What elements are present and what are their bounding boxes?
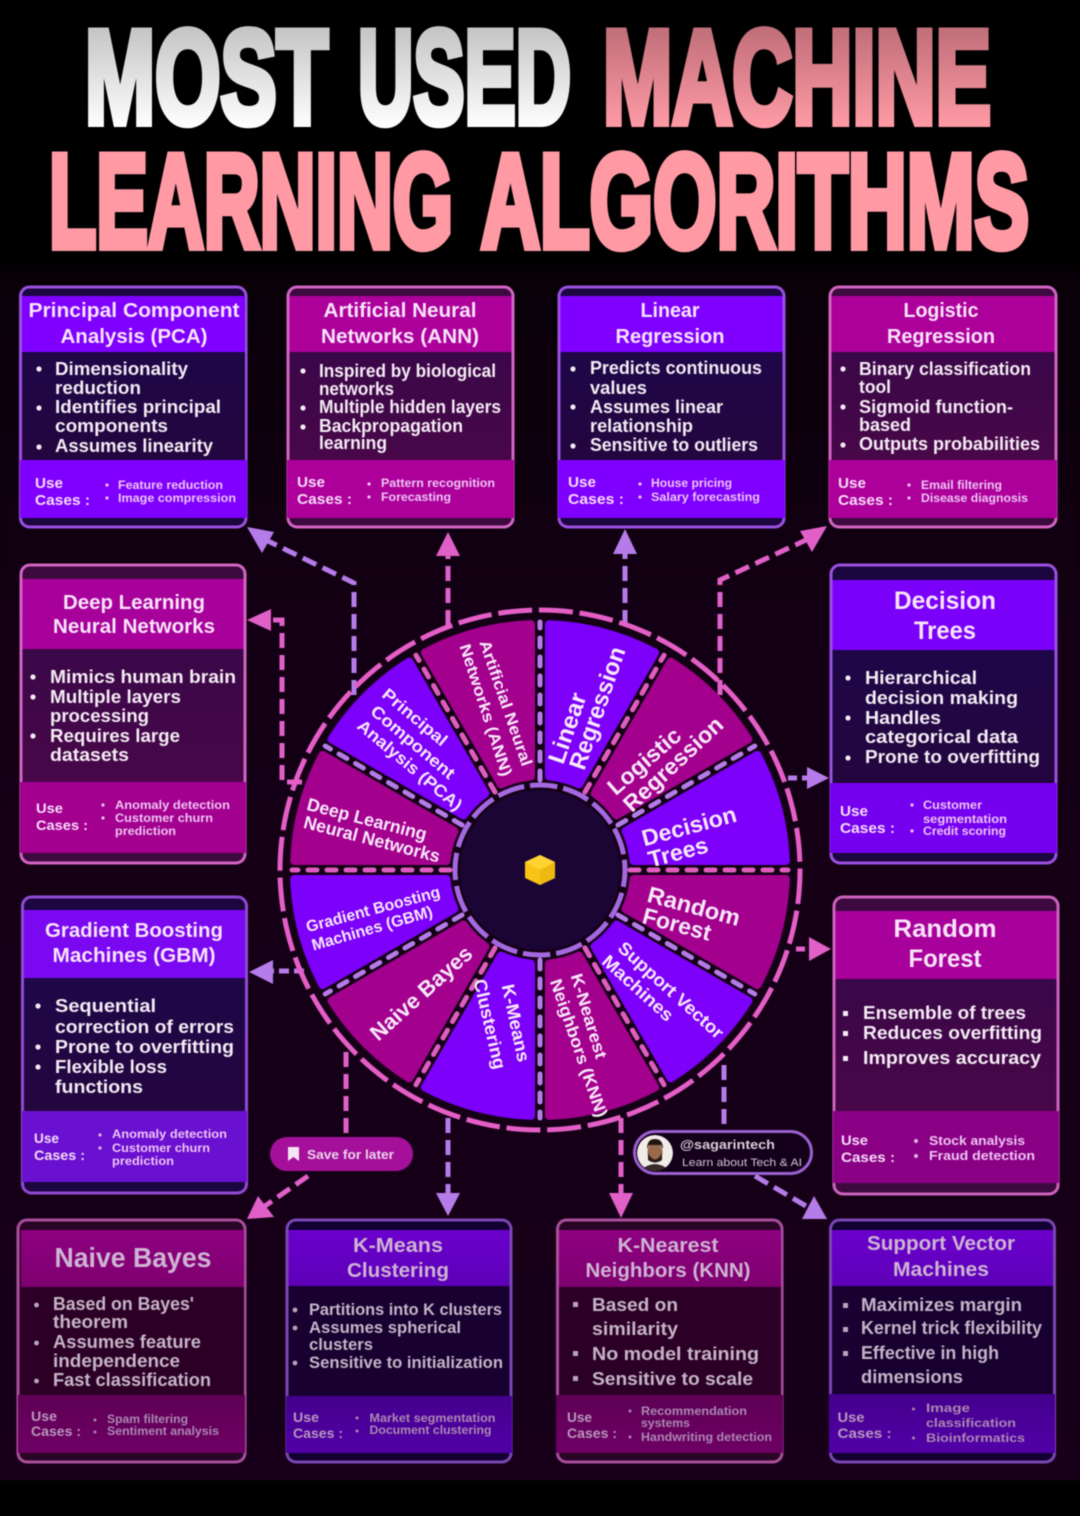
- bullet list: [35, 996, 234, 1097]
- use cases: Bioinformatics: [926, 1433, 1025, 1445]
- wheel segment labels: Support Vector: [614, 938, 728, 1043]
- callout: author badge: [634, 1132, 812, 1174]
- use cases: [568, 474, 760, 508]
- use cases: Cases :: [293, 1425, 343, 1441]
- wheel segment labels: Analysis (PCA): [353, 716, 466, 815]
- use cases: Image: [926, 1403, 970, 1415]
- header band: [288, 1230, 510, 1286]
- heading: K-Nearest: [618, 1235, 719, 1257]
- card frame: [831, 565, 1056, 863]
- wheel segment labels: Component: [367, 702, 459, 783]
- bullet list: Multiple hidden layers: [319, 397, 501, 417]
- use cases: Customer churn: [115, 813, 213, 825]
- bullet list: Partitions into K clusters: [309, 1301, 502, 1319]
- wheel segment labels: Neighbors (KNN): [546, 977, 611, 1120]
- use cases: [36, 800, 230, 838]
- wheel segment labels: Regression: [618, 711, 728, 817]
- panel: Logistic Regression: [829, 287, 1057, 527]
- wheel segment labels: Deep Learning: [305, 794, 429, 844]
- heading: Regression: [616, 326, 724, 348]
- heading: Neighbors (KNN): [586, 1260, 750, 1282]
- card frame: [830, 287, 1056, 527]
- bullet list: [845, 668, 1040, 767]
- title: USED: [358, 4, 571, 152]
- bullet list: Maximizes margin: [861, 1295, 1022, 1315]
- use cases: Use: [838, 475, 866, 492]
- heading: Networks (ANN): [321, 326, 479, 348]
- arrow: wheel to K-Nearest Neighbors: [609, 1118, 633, 1218]
- heading: [28, 300, 240, 348]
- bullet list: Multiple layers: [50, 687, 181, 707]
- panel: Deep Learning Neural Networks: [20, 565, 246, 863]
- bullet list: [843, 1295, 1042, 1387]
- card frame: [21, 565, 245, 863]
- header band: [832, 1230, 1053, 1286]
- bullet list: Prone to overfitting: [865, 747, 1040, 767]
- use cases: Anomaly detection: [115, 800, 230, 812]
- bullet list: [840, 359, 1040, 454]
- heading: [53, 592, 215, 638]
- arrow: wheel to Logistic Regression: [720, 526, 827, 695]
- wheel segment labels: Decision: [639, 801, 739, 851]
- use cases: Cases :: [35, 492, 90, 509]
- panel: Linear Regression: [558, 287, 785, 527]
- use cases: [297, 474, 495, 508]
- use cases: Use: [840, 803, 868, 820]
- header band: [836, 911, 1056, 979]
- heading: Naive Bayes: [54, 1242, 212, 1273]
- heading: Artificial Neural: [324, 300, 476, 322]
- use cases: Cases :: [567, 1425, 617, 1441]
- bullet list: values: [590, 378, 647, 398]
- use cases: Cases :: [31, 1423, 81, 1439]
- heading: Support Vector: [867, 1233, 1015, 1255]
- heading: Trees: [914, 617, 976, 645]
- bullet list: Prone to overfitting: [55, 1037, 234, 1057]
- use cases: Salary forecasting: [651, 492, 760, 504]
- wheel segment labels: Regression: [564, 643, 631, 773]
- use cases: Anomaly detection: [112, 1129, 227, 1141]
- use cases: segmentation: [923, 814, 1007, 826]
- use cases: Use: [841, 1132, 868, 1148]
- wheel segments: [270, 600, 810, 1140]
- bullet list: [843, 1003, 1042, 1068]
- card frame: [288, 287, 513, 527]
- bullet list: Effective in high: [861, 1343, 999, 1363]
- card frame: [18, 1220, 245, 1462]
- bullet list: Ensemble of trees: [863, 1003, 1026, 1023]
- header band: [560, 296, 782, 352]
- use cases: [838, 475, 1028, 509]
- bullet list: [34, 1294, 211, 1390]
- use cases: Use: [838, 1409, 865, 1425]
- use cases: Customer: [923, 800, 983, 812]
- wheel segment labels: [302, 638, 743, 1120]
- heading: [45, 920, 223, 967]
- header band: [22, 296, 245, 352]
- bullet list: independence: [53, 1351, 180, 1371]
- arrow: wheel to Naive Bayes: [247, 1052, 346, 1219]
- use cases: Cases :: [297, 491, 352, 508]
- use cases: Use: [567, 1409, 592, 1425]
- use cases: Recommendation: [641, 1406, 747, 1418]
- bullet list: based: [859, 415, 911, 435]
- use cases: Use: [36, 800, 63, 816]
- bullet list: Sensitive to scale: [592, 1369, 753, 1389]
- use cases: [293, 1409, 496, 1441]
- header band: [559, 1230, 781, 1287]
- use cases: Use: [31, 1408, 57, 1424]
- wheel segment labels: Machines: [598, 951, 678, 1025]
- arrow: wheel to Principal Component Analysis: [247, 527, 354, 695]
- bullet list: Identifies principal: [55, 397, 221, 417]
- panel: K-Means Clustering: [286, 1220, 512, 1462]
- heading: K-Means: [353, 1235, 443, 1257]
- heading: Random: [894, 915, 996, 943]
- panel: Support Vector Machines: [829, 1220, 1055, 1462]
- use cases: Use: [297, 474, 325, 491]
- title: LEARNING: [49, 128, 453, 276]
- use cases: Use: [293, 1409, 319, 1425]
- use cases: Market segmentation: [370, 1413, 496, 1425]
- bullet list: Sigmoid function-: [859, 397, 1013, 417]
- bullet list: Predicts continuous: [590, 358, 762, 378]
- bullet list: relationship: [590, 416, 693, 436]
- bullet list: components: [55, 416, 168, 436]
- use cases: Use: [34, 1130, 59, 1146]
- wheel segment labels: Machines (GBM): [310, 904, 435, 954]
- arrow: wheel to K-Means: [436, 1118, 460, 1216]
- panel: Artificial Neural Networks: [287, 287, 514, 527]
- title: [49, 4, 1029, 276]
- heading: Principal Component: [28, 300, 240, 322]
- wheel segment labels: K-Nearest: [567, 971, 611, 1061]
- panel: Principal Component Analysis: [20, 287, 247, 527]
- wheel segment labels: Random: [645, 881, 743, 931]
- bullet list: Mimics human brain: [50, 667, 236, 687]
- use cases: Use: [568, 474, 596, 491]
- heading: [867, 1233, 1015, 1281]
- use cases: Use: [35, 475, 63, 492]
- use cases: systems: [641, 1418, 690, 1430]
- use cases: Spam filtering: [107, 1414, 188, 1426]
- wheel diagram: [270, 600, 810, 1140]
- bullet list: Sensitive to outliers: [590, 435, 758, 455]
- heading: Clustering: [347, 1260, 449, 1282]
- use cases: Cases :: [36, 817, 88, 833]
- arrow: wheel to Linear Regression: [613, 529, 637, 625]
- use cases: House pricing: [651, 478, 732, 490]
- title: MOST: [85, 4, 328, 152]
- use cases: Cases :: [838, 1425, 892, 1441]
- heading: Linear: [640, 300, 700, 322]
- use cases: Image compression: [118, 493, 236, 505]
- bullet list: Backpropagation: [319, 416, 463, 436]
- panel: K-Nearest Neighbors: [556, 1220, 783, 1462]
- wheel segment labels: Gradient Boosting: [304, 884, 442, 936]
- use cases: Sentiment analysis: [107, 1426, 219, 1438]
- bullet list: Dimensionality: [55, 359, 188, 379]
- bullet list: Assumes linear: [590, 397, 723, 417]
- use cases: classification: [926, 1418, 1016, 1430]
- heading: Gradient Boosting: [45, 920, 223, 942]
- wheel segment labels: Linear: [543, 689, 592, 767]
- use cases: Customer churn: [112, 1143, 210, 1155]
- wheel segment labels: K-Means: [498, 982, 534, 1064]
- use cases: Handwriting detection: [641, 1432, 772, 1444]
- use cases: Fraud detection: [929, 1148, 1035, 1163]
- use cases: Cases :: [840, 820, 895, 837]
- card frame: [830, 1220, 1054, 1462]
- bullet list: theorem: [53, 1312, 128, 1332]
- bullet list: Kernel trick flexibility: [861, 1318, 1042, 1338]
- bullet list: Fast classification: [53, 1370, 211, 1390]
- header band: [21, 1230, 244, 1287]
- bullet list: reduction: [55, 378, 141, 398]
- wheel segment labels: Forest: [640, 902, 714, 946]
- header band: [24, 910, 245, 978]
- use cases: [567, 1406, 772, 1444]
- arrow: wheel to Support Vector Machines: [724, 1065, 827, 1219]
- bullet list: functions: [55, 1077, 143, 1097]
- wheel outer dashed ring: [280, 610, 800, 1130]
- bullet list: networks: [319, 379, 394, 399]
- use cases: Credit scoring: [923, 826, 1006, 838]
- bullet list: Reduces overfitting: [863, 1023, 1042, 1043]
- heading: Decision: [894, 587, 996, 615]
- panel: Random Forest: [833, 897, 1059, 1194]
- bullet list: Inspired by biological: [319, 361, 496, 381]
- use cases: Cases :: [34, 1147, 85, 1163]
- bullet list: correction of errors: [55, 1017, 234, 1037]
- heading: Machines (GBM): [52, 945, 215, 967]
- panel: Gradient Boosting Machines: [22, 897, 247, 1193]
- use cases: [841, 1132, 1035, 1165]
- wheel segment labels: Artificial Neural: [475, 638, 534, 769]
- use cases: Stock analysis: [929, 1133, 1025, 1148]
- header band: [290, 296, 512, 352]
- heading: Logistic: [904, 300, 978, 322]
- heading: [586, 1235, 750, 1282]
- bullet list: [300, 361, 501, 453]
- icon: bookmark: [288, 1147, 299, 1161]
- bullet list: Requires large: [50, 726, 180, 746]
- heading: Neural Networks: [53, 616, 215, 638]
- card frame: [20, 287, 246, 527]
- callout: author badge: @sagarintech: [680, 1137, 775, 1152]
- header band: [832, 296, 1054, 352]
- bullet list: Based on Bayes': [53, 1294, 194, 1314]
- bullet list: [30, 667, 236, 765]
- bullet list: Improves accuracy: [863, 1048, 1041, 1068]
- wheel segment labels: Trees: [645, 832, 711, 872]
- card frame: [558, 1220, 782, 1462]
- bullet list: Flexible loss: [55, 1057, 167, 1077]
- use cases: Document clustering: [370, 1425, 492, 1437]
- bullet list: [293, 1301, 503, 1372]
- panel: Decision Trees: [830, 565, 1057, 863]
- heading: Regression: [887, 326, 995, 348]
- heading: [616, 300, 724, 348]
- card frame: [287, 1220, 511, 1462]
- arrow: wheel to Decision Trees: [788, 767, 829, 789]
- bullet list: tool: [859, 377, 891, 397]
- icon: yellow cube: [525, 855, 555, 885]
- icon: author avatar: [637, 1135, 673, 1172]
- bullet list: learning: [319, 433, 387, 453]
- heading: Forest: [908, 945, 982, 973]
- bullet list: clusters: [309, 1336, 373, 1354]
- arrow: wheel to Gradient Boosting: [249, 960, 304, 984]
- header band: [832, 580, 1054, 650]
- card frame: [559, 287, 784, 527]
- callout: author badge: Learn about Tech & AI: [682, 1157, 802, 1169]
- bullet list: Sequential: [55, 996, 156, 1016]
- heading: [887, 300, 995, 348]
- use cases: Forecasting: [381, 492, 451, 504]
- heading: Analysis (PCA): [60, 326, 208, 348]
- header band: [22, 579, 244, 649]
- bullet list: Assumes feature: [53, 1332, 201, 1352]
- bullet list: dimensions: [861, 1367, 963, 1387]
- bullet list: Handles: [865, 708, 941, 728]
- card frame: [834, 897, 1058, 1194]
- wheel segment labels: Principal: [378, 685, 451, 750]
- wheel segment labels: Neural Networks: [302, 812, 442, 866]
- use cases: Feature reduction: [118, 480, 223, 492]
- wheel hub: [460, 790, 620, 950]
- use cases: Pattern recognition: [381, 478, 495, 490]
- wheel segment labels: Logistic: [602, 722, 686, 800]
- arrow: wheel to Random Forest: [796, 937, 831, 961]
- use cases: prediction: [112, 1156, 174, 1168]
- bullet list: [36, 359, 221, 456]
- heading: Deep Learning: [63, 592, 205, 614]
- heading: [321, 300, 479, 348]
- bullet list: similarity: [592, 1319, 678, 1339]
- use cases: prediction: [115, 826, 176, 838]
- bullet list: Assumes linearity: [55, 436, 213, 456]
- use cases: Disease diagnosis: [921, 493, 1028, 505]
- bullet list: [573, 1295, 759, 1389]
- use cases: [35, 475, 236, 509]
- heading: [894, 587, 996, 645]
- use cases: Cases :: [568, 491, 624, 508]
- bullet list: decision making: [865, 688, 1018, 708]
- callout: save for later: Save for later: [307, 1147, 394, 1162]
- heading: [347, 1235, 449, 1282]
- use cases: Cases :: [841, 1149, 895, 1165]
- bullet list: Hierarchical: [865, 668, 977, 688]
- wheel segment labels: Naive Bayes: [365, 941, 477, 1046]
- arrow: wheel to Deep Learning: [247, 609, 302, 782]
- bullet list: Based on: [592, 1295, 678, 1315]
- bullet list: datasets: [50, 745, 129, 765]
- callout: save for later: [270, 1137, 413, 1171]
- panel: Naive Bayes: [18, 1220, 245, 1462]
- bullet list: categorical data: [865, 727, 1019, 747]
- bullet list: Outputs probabilities: [859, 434, 1040, 454]
- bullet list: [570, 358, 762, 455]
- use cases: [34, 1129, 227, 1168]
- use cases: [838, 1403, 1025, 1445]
- use cases: Cases :: [838, 492, 893, 509]
- bullet list: Assumes spherical: [309, 1319, 461, 1337]
- card frame: [22, 897, 246, 1193]
- bullet list: No model training: [592, 1344, 759, 1364]
- arrow: wheel to Artificial Neural Networks: [436, 532, 460, 625]
- wheel segment labels: Networks (ANN): [456, 642, 514, 779]
- bullet list: processing: [50, 706, 149, 726]
- bullet list: Binary classification: [859, 359, 1031, 379]
- use cases: Email filtering: [921, 480, 1002, 492]
- bullet list: Sensitive to initialization: [309, 1354, 503, 1372]
- heading: Machines: [893, 1259, 989, 1281]
- use cases: [840, 800, 1007, 838]
- heading: [894, 915, 996, 973]
- use cases: [31, 1408, 219, 1439]
- wheel segment labels: Clustering: [470, 977, 510, 1071]
